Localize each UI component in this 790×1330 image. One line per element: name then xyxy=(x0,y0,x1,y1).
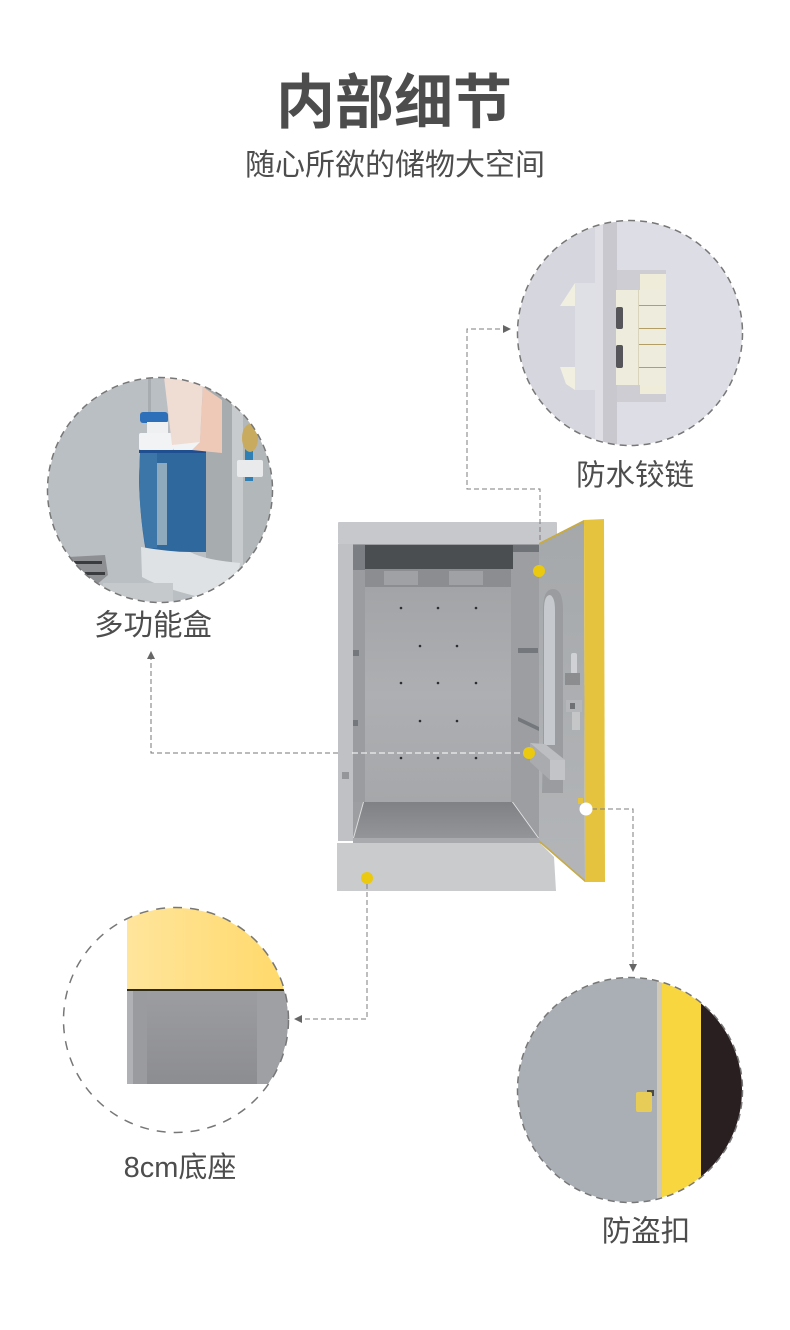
circle: multifunction box xyxy=(45,375,275,608)
back wall screw holes xyxy=(400,607,477,759)
door xyxy=(530,519,605,882)
circle: 8cm base xyxy=(64,900,297,1132)
connector: anti-theft clasp xyxy=(592,809,637,972)
base xyxy=(337,843,556,891)
shelf clips xyxy=(353,648,539,731)
label: 8cm base: 8cm底座 xyxy=(124,1151,236,1184)
storage box xyxy=(530,743,565,780)
connector: hinge xyxy=(467,325,540,540)
subtitle: 随心所欲的储物大空间 xyxy=(245,149,545,182)
connector: base xyxy=(294,884,367,1023)
circle: waterproof hinge xyxy=(515,218,745,448)
label: anti-theft clasp: 防盗扣 xyxy=(602,1215,690,1248)
connector: multifunction box xyxy=(147,651,525,753)
circle: anti-theft clasp xyxy=(515,975,746,1205)
label: multifunction box: 多功能盒 xyxy=(94,609,212,642)
title: 内部细节 xyxy=(276,70,512,136)
door recess xyxy=(542,589,563,793)
locker xyxy=(337,519,605,891)
marker dots xyxy=(361,565,592,884)
lock xyxy=(565,653,582,730)
label: waterproof hinge: 防水铰链 xyxy=(576,459,694,492)
top frame xyxy=(338,522,557,544)
left frame xyxy=(338,544,353,841)
locker interior xyxy=(353,544,543,844)
